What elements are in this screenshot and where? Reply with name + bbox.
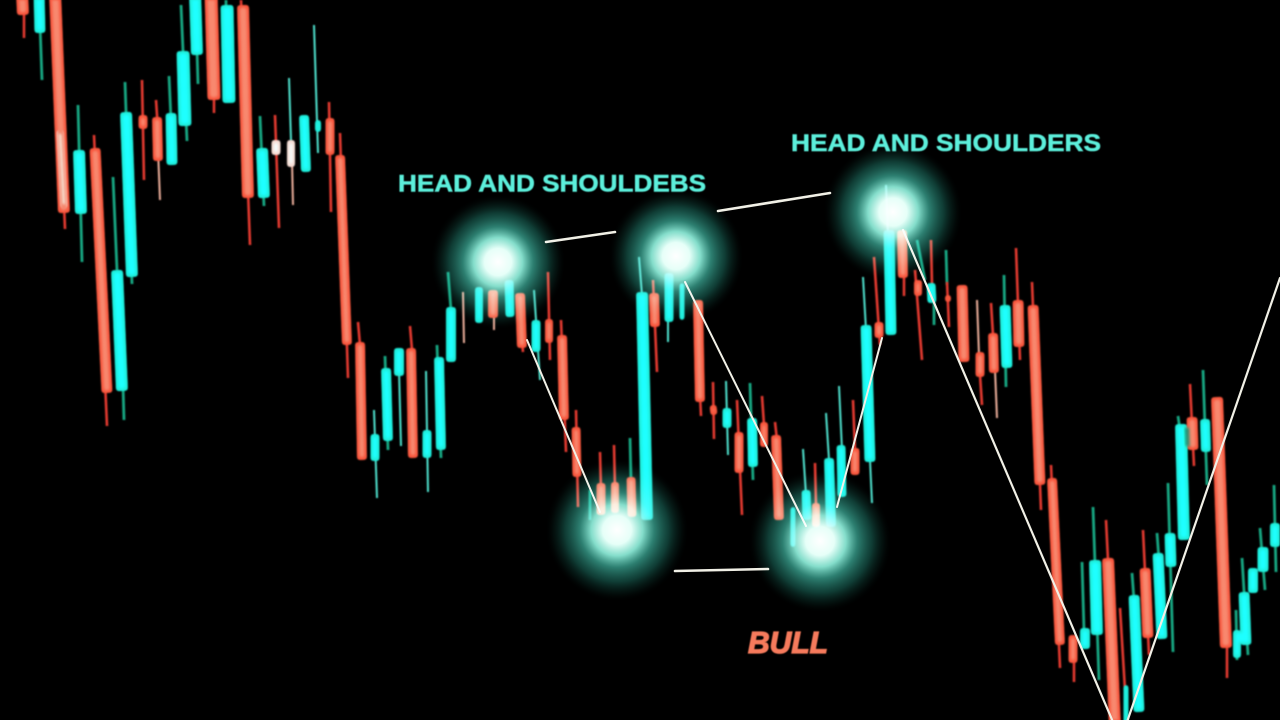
neckline: upper left segment xyxy=(546,232,615,242)
candles: right cluster xyxy=(1051,370,1276,720)
neckline: upper right segment xyxy=(718,193,830,211)
glow markers xyxy=(430,142,963,613)
candles: left shoulder xyxy=(479,272,578,507)
candles: right shoulder and decline xyxy=(874,185,1041,510)
trend lines xyxy=(527,193,1280,720)
neckline: lower segment xyxy=(675,569,768,571)
trend line: second leg down xyxy=(685,282,806,526)
trend line: final rally xyxy=(1127,278,1280,720)
glow: left trough xyxy=(545,458,689,602)
glow: right peak xyxy=(823,142,963,282)
label: right head and shoulders: HEAD AND SHOULDERS xyxy=(791,130,1101,157)
candles: lower left cluster xyxy=(358,272,464,498)
candles: left cluster xyxy=(22,0,348,426)
glow: right trough xyxy=(748,469,892,613)
glow: left shoulder peak xyxy=(430,194,566,330)
glow: middle peak xyxy=(608,188,744,324)
trend line: leg up to head xyxy=(837,338,882,507)
candles: trough and head xyxy=(590,257,872,547)
label: bull: BULL xyxy=(748,625,828,660)
trend line: long decline xyxy=(903,230,1113,720)
label: left head and shoulders: HEAD AND SHOULDEBS xyxy=(398,170,706,198)
trend line: first leg down xyxy=(527,340,600,512)
